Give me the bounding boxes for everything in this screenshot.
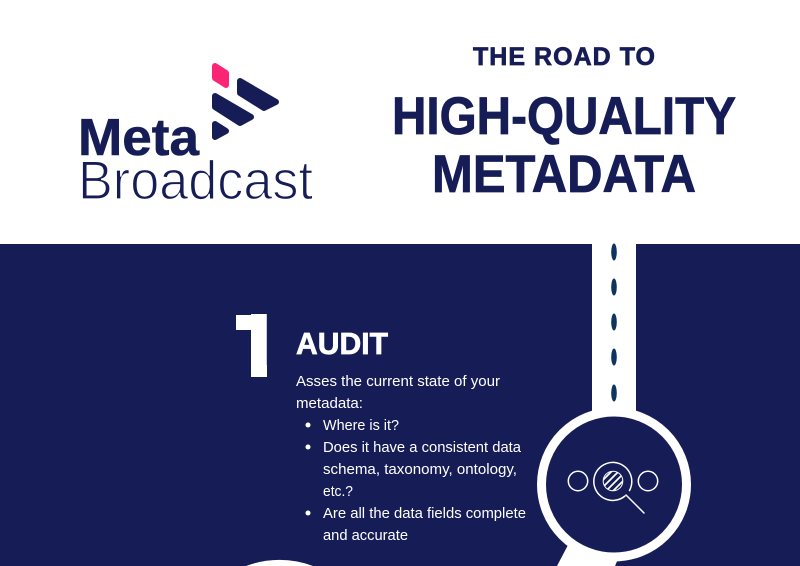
road surface xyxy=(592,244,636,414)
icon: magnifier lens xyxy=(594,462,632,500)
logo mark xyxy=(215,66,276,137)
step heading: AUDIT: AUDIT xyxy=(296,326,388,361)
bullet: completeness xyxy=(306,506,526,544)
logo mark: small triangle xyxy=(215,124,226,137)
icon: magnifier over data dots xyxy=(568,462,658,513)
bullet: schema: schema, taxonomy, ontology, xyxy=(323,462,517,478)
logo word: Broadcast: Broadcast xyxy=(78,149,313,211)
icon: left dot xyxy=(568,471,588,491)
bullet: schema: etc.? xyxy=(323,484,353,500)
step number 1 xyxy=(236,314,267,377)
logo mark: middle band xyxy=(215,96,251,123)
bullet: schema xyxy=(306,440,522,500)
step number 1: 1 xyxy=(232,299,280,396)
title line 2: METADATA xyxy=(432,145,696,204)
milestone ring xyxy=(542,412,686,557)
bullet: schema: Does it have a consistent data xyxy=(323,440,522,456)
intro text: Asses the current state of your xyxy=(296,374,500,390)
bullet: where: Where is it? xyxy=(323,418,399,434)
road continuation below the stop xyxy=(557,545,621,566)
icon: right dot xyxy=(638,471,658,491)
logo mark: pink tile xyxy=(215,66,226,85)
title kicker: THE ROAD TO xyxy=(473,43,655,71)
icon: magnifier handle xyxy=(626,495,644,513)
title line 1: HIGH-QUALITY xyxy=(392,87,736,146)
navy panel xyxy=(0,244,800,566)
step description xyxy=(296,374,526,544)
road xyxy=(557,244,636,566)
logo mark: upper band xyxy=(240,81,276,108)
title block xyxy=(392,43,736,204)
bullet: completeness: Are all the data fields complete xyxy=(323,506,526,522)
next milestone ring, cropped xyxy=(246,560,313,566)
intro text: metadata: xyxy=(296,396,363,412)
logo word: Meta: Meta xyxy=(78,109,200,167)
logo: Meta Broadcast xyxy=(78,66,313,211)
bullet: completeness: and accurate xyxy=(323,528,408,544)
road centre dashes xyxy=(611,244,617,402)
intro text xyxy=(296,374,500,412)
icon: hatched centre xyxy=(602,470,624,492)
